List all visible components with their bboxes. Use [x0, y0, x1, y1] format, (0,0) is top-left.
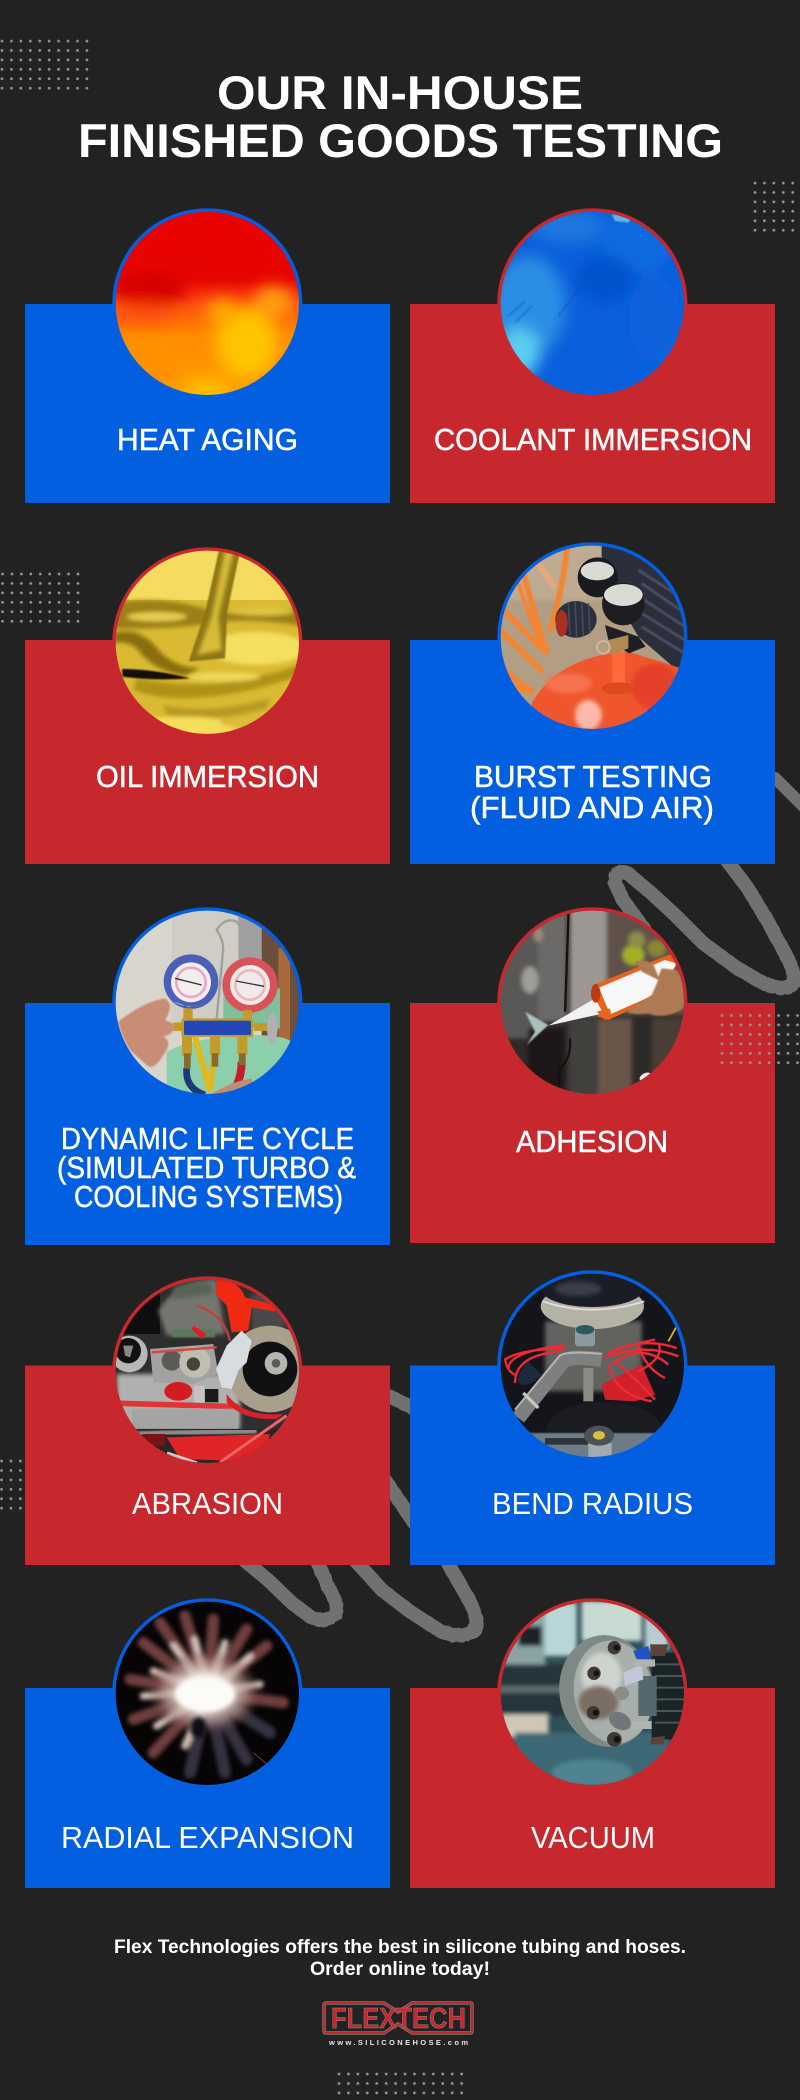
- label: VACUUM: [531, 1820, 655, 1855]
- photo: blue coolant: [492, 206, 690, 401]
- label: HEAT AGING: [117, 422, 298, 457]
- label: [57, 1121, 356, 1214]
- label: RADIAL EXPANSION: [61, 1820, 354, 1855]
- photo: sealant gun: [495, 905, 690, 1100]
- panel background: [25, 1003, 390, 1245]
- panel: vacuum: [410, 1596, 775, 1888]
- label: OIL IMMERSION: [96, 759, 319, 794]
- photo: compressor gauges: [495, 540, 692, 735]
- logo: Flextech: [324, 2003, 472, 2047]
- panel: dynamic life cycle: [25, 905, 390, 1245]
- panel: abrasion: [25, 1274, 390, 1565]
- title: FINISHED GOODS TESTING: [78, 114, 723, 167]
- panel: oil immersion: [25, 545, 390, 864]
- label: BEND RADIUS: [492, 1486, 693, 1521]
- dot grid: lower left: [0, 1456, 25, 1513]
- photo: golden oil: [110, 545, 307, 740]
- label: ABRASION: [132, 1486, 283, 1521]
- panel: radial expansion: [25, 1596, 390, 1888]
- label: COOLING SYSTEMS): [74, 1179, 343, 1214]
- panel: adhesion: [410, 905, 775, 1243]
- title: [78, 66, 723, 167]
- label: (FLUID AND AIR): [470, 790, 714, 825]
- scribble: grey hand-drawn loops behind panels: [244, 778, 800, 1635]
- label: DYNAMIC LIFE CYCLE: [61, 1121, 354, 1156]
- dot grid: top right: [750, 178, 798, 235]
- footer text: Flex Technologies offers the best in silicone tubing and hoses.: [114, 1937, 686, 1958]
- photo: manifold gauges: [110, 905, 307, 1102]
- panel background: [410, 1003, 775, 1243]
- label: ADHESION: [516, 1124, 668, 1159]
- panel background: [410, 304, 775, 503]
- dot grid: over adhesion panel: [717, 1011, 800, 1067]
- panel: burst testing: [410, 540, 775, 864]
- logo: Flextech: www.SILICONEHOSE.com: [328, 2038, 468, 2047]
- panel background: [25, 1366, 390, 1565]
- dot grid: bottom center: [334, 2069, 466, 2100]
- label: BURST TESTING: [474, 759, 712, 794]
- photo: heat gradient: [112, 208, 302, 395]
- dot grid: top left: [0, 36, 92, 93]
- label: [470, 759, 714, 825]
- photo: light burst: [110, 1596, 305, 1791]
- footer text: [114, 1937, 686, 1980]
- panel background: [410, 1688, 775, 1888]
- panel background: [25, 304, 390, 503]
- label: COOLANT IMMERSION: [434, 422, 752, 457]
- dot grid: middle left: [0, 569, 83, 626]
- logo: Flextech: FLEXTECH: [331, 2003, 466, 2035]
- photo: engine bay: [495, 1268, 690, 1463]
- panel background: [25, 640, 390, 864]
- panel background: [25, 1688, 390, 1888]
- label: (SIMULATED TURBO &: [57, 1150, 356, 1185]
- panel: bend radius: [410, 1268, 775, 1565]
- title: OUR IN-HOUSE: [217, 66, 583, 119]
- photo: brake assembly: [112, 1276, 302, 1463]
- panel: coolant immersion: [410, 206, 775, 503]
- panel background: [410, 640, 775, 864]
- footer text: Order online today!: [310, 1959, 490, 1980]
- panel background: [410, 1366, 775, 1565]
- panel: heat aging: [25, 206, 390, 503]
- photo: vacuum flange: [495, 1596, 690, 1791]
